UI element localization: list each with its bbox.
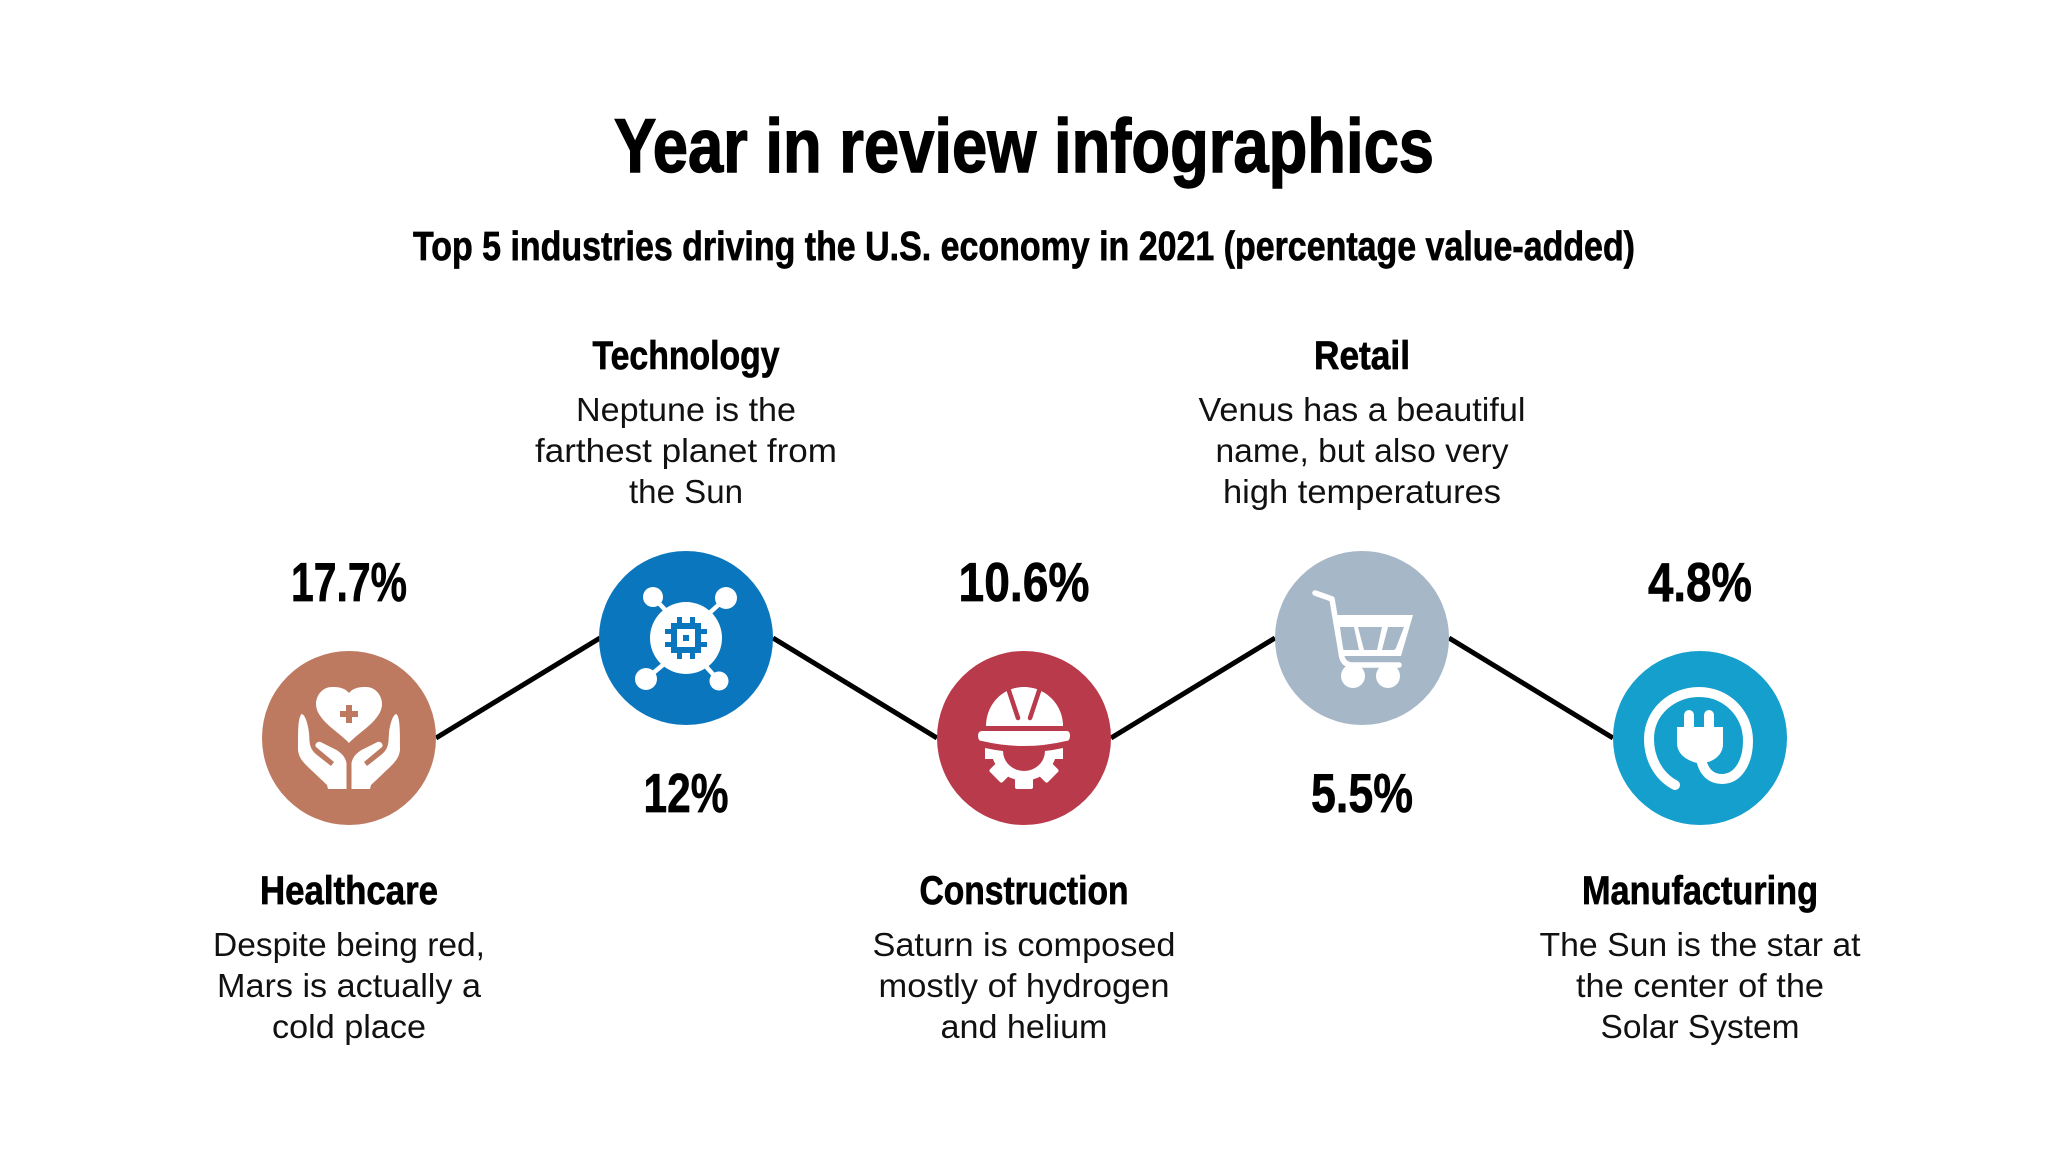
technology percentage: 12% (644, 762, 728, 824)
healthcare heading: Healthcare (260, 869, 438, 913)
icon: technology chip network (599, 551, 773, 725)
retail percentage: 5.5% (1311, 762, 1413, 824)
technology heading: Technology (592, 334, 780, 378)
construction heading: Construction (920, 869, 1128, 913)
icon: construction helmet and gear (937, 651, 1111, 825)
construction percentage: 10.6% (958, 551, 1090, 613)
retail description: high temperatures (1223, 473, 1501, 510)
manufacturing percentage: 4.8% (1648, 551, 1752, 613)
manufacturing description: The Sun is the star at (1540, 926, 1860, 963)
construction description: mostly of hydrogen (878, 967, 1170, 1004)
retail description: Venus has a beautiful (1198, 391, 1526, 428)
retail description: name, but also very (1216, 432, 1509, 469)
healthcare description: Despite being red, (213, 926, 485, 963)
healthcare percentage: 17.7% (291, 551, 407, 613)
healthcare description: cold place (272, 1008, 426, 1045)
construction description: Saturn is composed (872, 926, 1176, 963)
icon: manufacturing electric plug (1613, 651, 1787, 825)
construction description: and helium (940, 1008, 1108, 1045)
manufacturing description: the center of the (1576, 967, 1824, 1004)
technology description (535, 391, 837, 510)
technology description: the Sun (629, 473, 743, 510)
manufacturing description: Solar System (1600, 1008, 1800, 1045)
connecting line chart (436, 638, 1613, 738)
healthcare description: Mars is actually a (217, 967, 482, 1004)
icon: retail shopping cart (1275, 551, 1449, 725)
manufacturing heading: Manufacturing (1582, 869, 1818, 913)
icon: healthcare hands and heart (262, 651, 436, 825)
retail description (1198, 391, 1526, 510)
technology description: Neptune is the (576, 391, 796, 428)
panel: healthcare (213, 551, 485, 1045)
manufacturing description (1540, 926, 1860, 1045)
construction description (872, 926, 1176, 1045)
panel: manufacturing (1540, 551, 1860, 1045)
retail heading: Retail (1314, 334, 1410, 378)
panel: retail (1198, 334, 1526, 824)
panel: technology (535, 334, 837, 824)
technology description: farthest planet from (535, 432, 837, 469)
subtitle: Top 5 industries driving the U.S. economy in 2021 (percentage value-added) (413, 223, 1635, 269)
title: Year in review infographics (614, 104, 1434, 189)
healthcare description (213, 926, 485, 1045)
panel: construction (872, 551, 1176, 1045)
